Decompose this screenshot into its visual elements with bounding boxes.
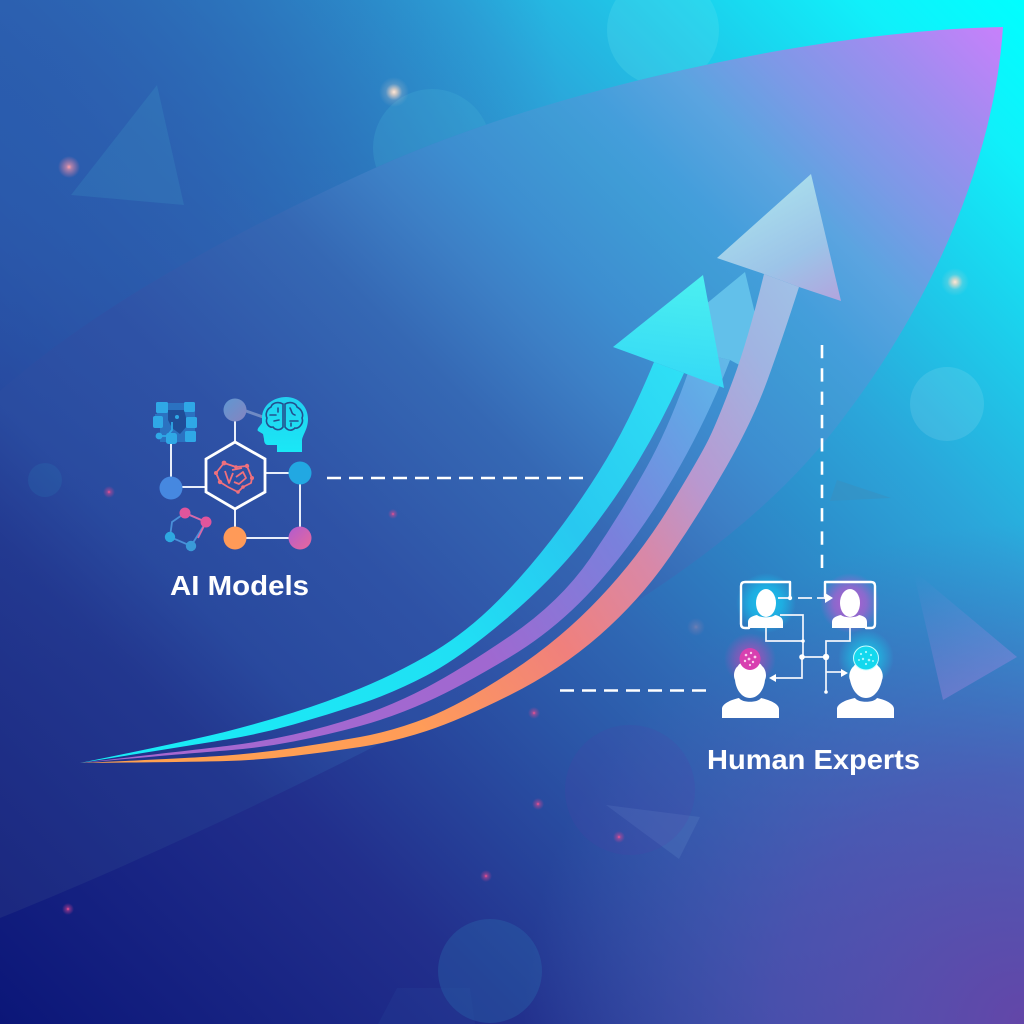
expert: right with cyan brain: [837, 646, 894, 718]
icon: cyan head with brain: [258, 397, 308, 452]
arrow: middle blue-purple: [80, 272, 765, 763]
person: top right: [832, 589, 867, 628]
dashed connector: Human Experts up: [821, 345, 823, 568]
icon: circuit chip cluster: [153, 402, 197, 444]
expert: left with pink brain: [722, 648, 779, 718]
arrow: front cyan: [80, 275, 724, 763]
label: Human Experts: Human Experts: [707, 744, 920, 775]
dashed connector: Human Experts left: [560, 689, 706, 692]
hexagon with neural brain: [206, 442, 265, 509]
growth arrows: [80, 174, 841, 763]
connector lines: [766, 598, 850, 692]
Human Experts network icon: [722, 573, 894, 718]
connector nodes and arrowheads: [769, 593, 848, 694]
glowing particles: [58, 77, 969, 915]
glows behind people: [724, 573, 894, 686]
AI Models network icon: [153, 397, 312, 551]
label: AI Models: AI Models: [170, 570, 309, 601]
dashed connector: AI Models: [327, 477, 583, 479]
decorative shapes behind swoosh: [71, 0, 719, 207]
decorative shapes over swoosh: [28, 367, 1017, 1024]
icon: small molecule ring: [165, 508, 212, 551]
screen frames: [741, 582, 875, 628]
person: top left: [748, 589, 783, 628]
network nodes: [160, 398, 312, 550]
arrow: back light purple-orange: [80, 174, 841, 763]
connecting lines: [171, 411, 300, 538]
